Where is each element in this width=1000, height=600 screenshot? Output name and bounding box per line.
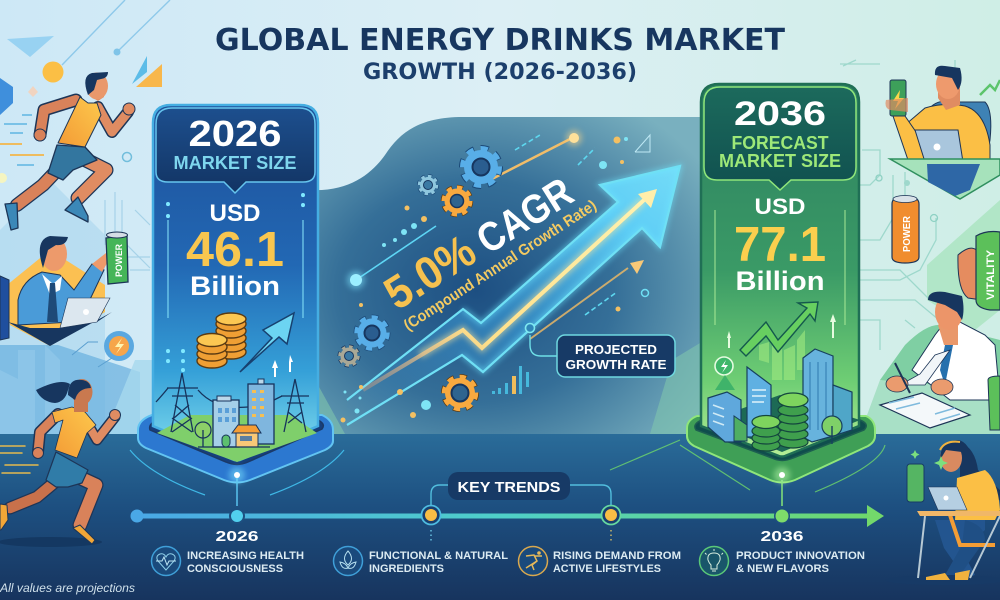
callout: projected growth rate [526, 324, 675, 377]
label forecast market size: FORECAST [732, 133, 829, 153]
icon: heart [152, 546, 180, 576]
trend: increasing health consciousness: CONSCIOUSNESS [187, 563, 283, 575]
year 2026: 2026 [188, 113, 282, 154]
footnote: All values are projections [0, 583, 135, 595]
panel body [153, 105, 318, 460]
trend: functional and natural ingredients [334, 546, 508, 576]
key trends label [431, 472, 611, 505]
trend: product innovation and new flavors: & NEW FLAVORS [736, 563, 829, 575]
city and power towers [156, 373, 317, 462]
icon: blue gear large [463, 149, 499, 185]
figure: man writing [880, 292, 1000, 430]
icon: vitality can in hand [958, 232, 1000, 310]
pedestal 2026 [130, 415, 344, 495]
callout: projected growth rate: PROJECTED [575, 343, 657, 357]
title [215, 23, 786, 85]
value 46.1 billion: 46.1 [186, 223, 284, 277]
connector 2026 [229, 467, 245, 506]
CAGR text: CAGR [468, 169, 581, 263]
figure: left businessman with can: POWER [114, 244, 124, 277]
figure: male runner [5, 72, 135, 230]
trend: rising demand from active lifestyles: ACTIVE LIFESTYLES [553, 563, 661, 575]
growth arrow [340, 130, 680, 425]
connector 2036 [774, 467, 790, 506]
header 2036 [704, 87, 856, 190]
icon: blue gear left [357, 318, 387, 348]
icon: small pale gear [420, 176, 436, 194]
pedestal 2036 [610, 416, 885, 492]
trend: functional and natural ingredients: INGREDIENTS [369, 563, 444, 575]
title: GROWTH (2026-2036) [363, 60, 637, 85]
value 46.1 billion: USD [210, 200, 260, 227]
icon: runner [518, 546, 548, 576]
value 77.1 billion [734, 194, 826, 296]
panel: 2036 forecast market size [610, 84, 885, 492]
timeline [130, 505, 884, 543]
trend: increasing health consciousness [152, 546, 304, 576]
trend: product innovation and new flavors [700, 546, 865, 576]
icon: orange gear [444, 188, 470, 214]
trend: increasing health consciousness: INCREASING HEALTH [187, 550, 304, 562]
icon: light bulb [700, 546, 728, 576]
icon: power can: POWER [902, 215, 913, 252]
label: 2026: 2026 [216, 528, 258, 545]
panel body [701, 84, 859, 456]
year 2036: 2036 [734, 95, 826, 133]
callout: projected growth rate: GROWTH RATE [566, 358, 666, 372]
value 46.1 billion [186, 200, 284, 301]
figure: woman at desk [885, 440, 1000, 585]
label forecast market size [719, 133, 841, 171]
icon: orange gear bottom [444, 378, 476, 408]
figure: female runner [0, 379, 120, 547]
city and coins [707, 349, 860, 452]
central growth backdrop [310, 117, 705, 434]
CAGR text: (Compound Annual Growth Rate) [401, 197, 600, 334]
key trends label: KEY TRENDS [458, 479, 560, 496]
label forecast market size: MARKET SIZE [719, 151, 841, 171]
icon: coins and arrow [197, 313, 294, 377]
icon: green growth arrow and bars [727, 302, 836, 380]
panel: 2026 market size [130, 105, 344, 495]
icon: grey gear [340, 347, 358, 365]
trend: product innovation and new flavors: PRODUCT INNOVATION [736, 550, 865, 562]
icon: power can [892, 196, 919, 263]
value 46.1 billion: Billion [190, 271, 280, 301]
value 77.1 billion: USD [754, 194, 806, 219]
CAGR text: 5.0% [375, 224, 485, 319]
icon: vitality can in hand: VITALITY [985, 249, 997, 300]
label: 2036: 2036 [760, 528, 804, 545]
header 2026 [156, 108, 315, 193]
value 77.1 billion: Billion [736, 266, 824, 296]
trend: rising demand from active lifestyles [518, 546, 681, 576]
figure: left businessman with can [0, 232, 134, 367]
label market size: MARKET SIZE [174, 153, 296, 173]
gears [340, 149, 499, 408]
icon: leaf [334, 546, 362, 576]
bottom dark band [0, 434, 1000, 600]
title: GLOBAL ENERGY DRINKS MARKET [215, 23, 786, 58]
trend: functional and natural ingredients: FUNCTIONAL & NATURAL [369, 550, 508, 562]
trend: rising demand from active lifestyles: RISING DEMAND FROM [553, 550, 681, 562]
figure: man with can top right [886, 66, 1000, 199]
value 77.1 billion: 77.1 [734, 218, 826, 272]
